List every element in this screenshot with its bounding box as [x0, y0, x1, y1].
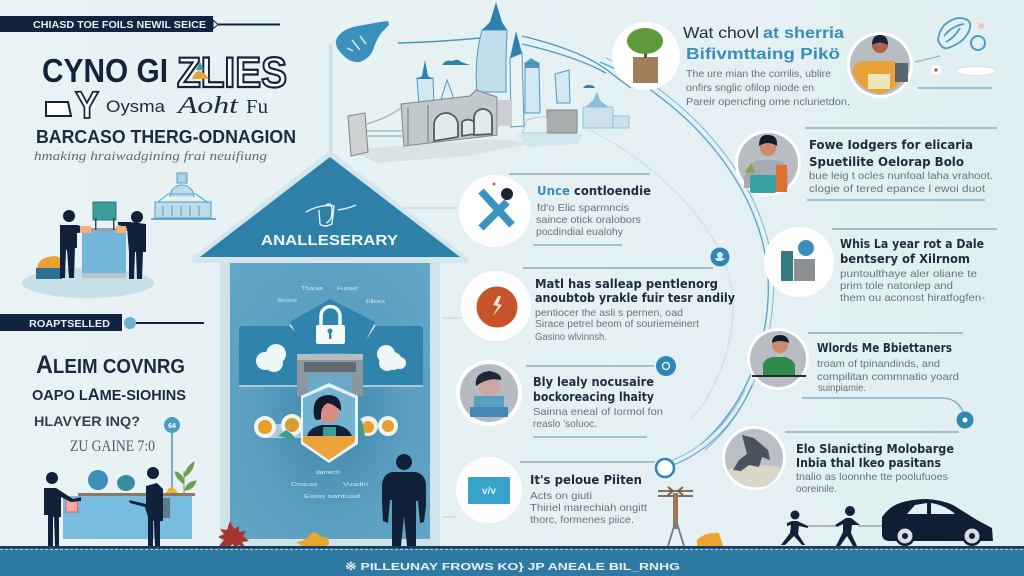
item: this year: puntoulthaye aler oliane te — [840, 268, 977, 280]
question text block — [32, 351, 186, 455]
header bar: top — [0, 16, 280, 32]
bottom band — [0, 546, 1024, 576]
item: lightning: Matl has salleap pentlenorg — [535, 277, 718, 291]
body: onfirs snglic ofilop niode en — [686, 82, 814, 94]
small labels below shield — [291, 470, 368, 500]
header bar: top: CHIASD TOE FOILS NEWIL SEICE — [33, 19, 206, 31]
item: uncertainty: Unce — [537, 184, 570, 198]
machine — [297, 354, 363, 396]
header bar: section — [0, 314, 204, 331]
title block: Oysma — [106, 97, 166, 116]
question text block: OAPO LAME-SIOHINS — [32, 385, 186, 404]
body: The ure mian the corrilis, ublire — [686, 68, 831, 80]
item: tree: at sherria — [763, 25, 844, 42]
title block: ZLIES — [177, 49, 287, 97]
man silhouette — [382, 454, 426, 546]
people at counter: lower scene — [44, 417, 196, 547]
item: this year: bentsery of Xilrnom — [840, 252, 970, 266]
people pulling car — [781, 499, 993, 546]
small labels below shield: Cmaces — [291, 482, 317, 488]
badge: blue icon — [710, 248, 730, 266]
signpost and coins — [658, 487, 723, 546]
title block: hmaking hraiwadgining frai neuifiung — [34, 148, 268, 163]
item: lightning: Sirace petrel beom of souriemeinert — [535, 318, 699, 330]
icon cluster top right — [915, 18, 996, 88]
item: lightning: anoubtob yrakle fuir tesr andily — [535, 291, 735, 305]
small labels below shield: Vuadin — [343, 482, 368, 488]
item: motorbike — [722, 426, 959, 495]
roof — [192, 150, 468, 263]
item: uncertainty: contloendie — [574, 184, 651, 198]
item: card: It's peloue Piiten — [530, 473, 642, 487]
panel: left cloud — [239, 325, 315, 386]
item: this year: Whis La year rot a Dale — [840, 237, 984, 251]
item: this year — [764, 227, 997, 304]
people at counter: lower scene: 64 — [168, 423, 176, 430]
question text block: HLAVYER INQ? — [34, 413, 140, 429]
item: card: thorc, formenes piice. — [530, 514, 634, 526]
item: mask person: Sainna eneal of Iormol fon — [533, 406, 663, 418]
ground decorations: splat and coins — [218, 521, 329, 549]
item: mask person — [456, 356, 676, 437]
car — [882, 499, 993, 546]
item: mask person: bockoreacing lhaity — [533, 390, 654, 404]
icon: blue bottle — [336, 21, 389, 62]
right building — [583, 93, 629, 128]
small labels above lock — [277, 286, 385, 305]
sketched ground — [350, 139, 527, 163]
panel: lock — [290, 299, 375, 353]
item: green shirt — [747, 328, 974, 428]
item: uncertainty: saince otick oralobors — [536, 214, 641, 226]
item: card: Thiriel marechiah ongitt — [530, 502, 647, 514]
item: motorbike: tnalio as loonnhe tte poolufuoes — [796, 471, 948, 483]
flowers row — [254, 414, 398, 440]
small labels below shield: Esoo santusd — [304, 494, 360, 500]
item: person with bag: clogie of tered epance l ewoi duot — [809, 183, 985, 195]
portrait: person in orange — [847, 32, 913, 98]
item: person with bag — [735, 128, 997, 200]
item: tree — [612, 22, 850, 108]
small labels above lock: Sruos — [277, 298, 297, 304]
item: card: Acts on giuti — [530, 490, 592, 502]
item: lightning: pentiocer the asli s pernen, oad — [535, 307, 683, 319]
roof: ANALLESERARY — [261, 232, 398, 249]
body: Pareir opencfing ome nclurietdon. — [686, 96, 850, 108]
heading: Wat chovl — [683, 25, 759, 42]
title block: Y — [75, 85, 99, 127]
item: mask person: reaslo 'soluoc. — [533, 418, 597, 430]
item: card — [456, 457, 674, 526]
people at desk: top scene — [22, 202, 154, 298]
item: uncertainty: fd'o Elic sparmncis — [537, 202, 629, 214]
item: lightning: Gasino wlvinnsh. — [535, 331, 607, 343]
item: green shirt: troam of tpinandinds, and — [817, 358, 940, 370]
towers — [417, 30, 570, 127]
arcs connecting the items — [403, 58, 774, 517]
item: this year: them ou aconost hiratfogfen- — [840, 292, 986, 304]
item: green shirt: Wlords Me Bbiettaners — [817, 341, 952, 355]
question text block: ALEIM COVNRG — [36, 351, 185, 379]
small labels above lock: Flices — [366, 299, 385, 305]
item: motorbike: ooreinile. — [796, 483, 837, 495]
stone fortress — [348, 90, 577, 156]
question text block: ZU GAINE 7:0 — [70, 438, 155, 455]
header bar: section: ROAPTSELLED — [29, 318, 110, 330]
shield with portrait — [301, 383, 358, 463]
house interior — [230, 263, 430, 539]
body — [686, 68, 850, 108]
item: motorbike: Elo Slanicting Molobarge — [796, 442, 954, 456]
icon: small domed building — [151, 173, 216, 219]
item: this year: prim tole natonlep and — [840, 280, 953, 292]
title block: Fu — [246, 96, 268, 118]
vertical pole above roof — [329, 44, 332, 152]
house: analysis panel — [192, 150, 468, 546]
item: person with bag: Fowe Iodgers for elicaria — [809, 138, 973, 152]
title block: CYNO GI — [42, 52, 168, 89]
item: green shirt: compilitan commnatio yoard — [817, 371, 959, 383]
title block: Aoht — [175, 93, 240, 119]
item: uncertainty — [459, 174, 651, 247]
item: uncertainty: pocdindial eualohy — [536, 226, 624, 238]
small labels above lock: Tharas — [301, 286, 323, 292]
skyline illustration — [336, 2, 631, 163]
cables — [398, 38, 480, 43]
item: tree: Bifivmttaing Pikö — [686, 46, 840, 63]
item: green shirt: suinpiamie. — [818, 382, 866, 394]
small labels above lock: Fusset — [337, 286, 359, 292]
item: card: v/v — [482, 486, 496, 497]
panel: right cloud — [350, 325, 423, 386]
title block — [34, 49, 296, 163]
house body frame — [220, 262, 440, 546]
small labels below shield: damech — [316, 470, 340, 476]
item: motorbike: Inbia thal Ikeo pasitans — [796, 456, 941, 470]
item: person with bag: Spuetilite Oelorap Bolo — [809, 155, 964, 169]
item: mask person: Bly lealy nocusaire — [533, 375, 654, 389]
bottom band: ※ PILLEUNAY FROWS KO} JP ANEALE BIL_RNHG — [345, 561, 680, 573]
title block: BARCASO THERG-ODNAGION — [36, 127, 296, 147]
item: person with bag: bue leig t ocles nunfoal laha vrahoot. — [809, 170, 993, 182]
item: lightning — [461, 268, 735, 343]
